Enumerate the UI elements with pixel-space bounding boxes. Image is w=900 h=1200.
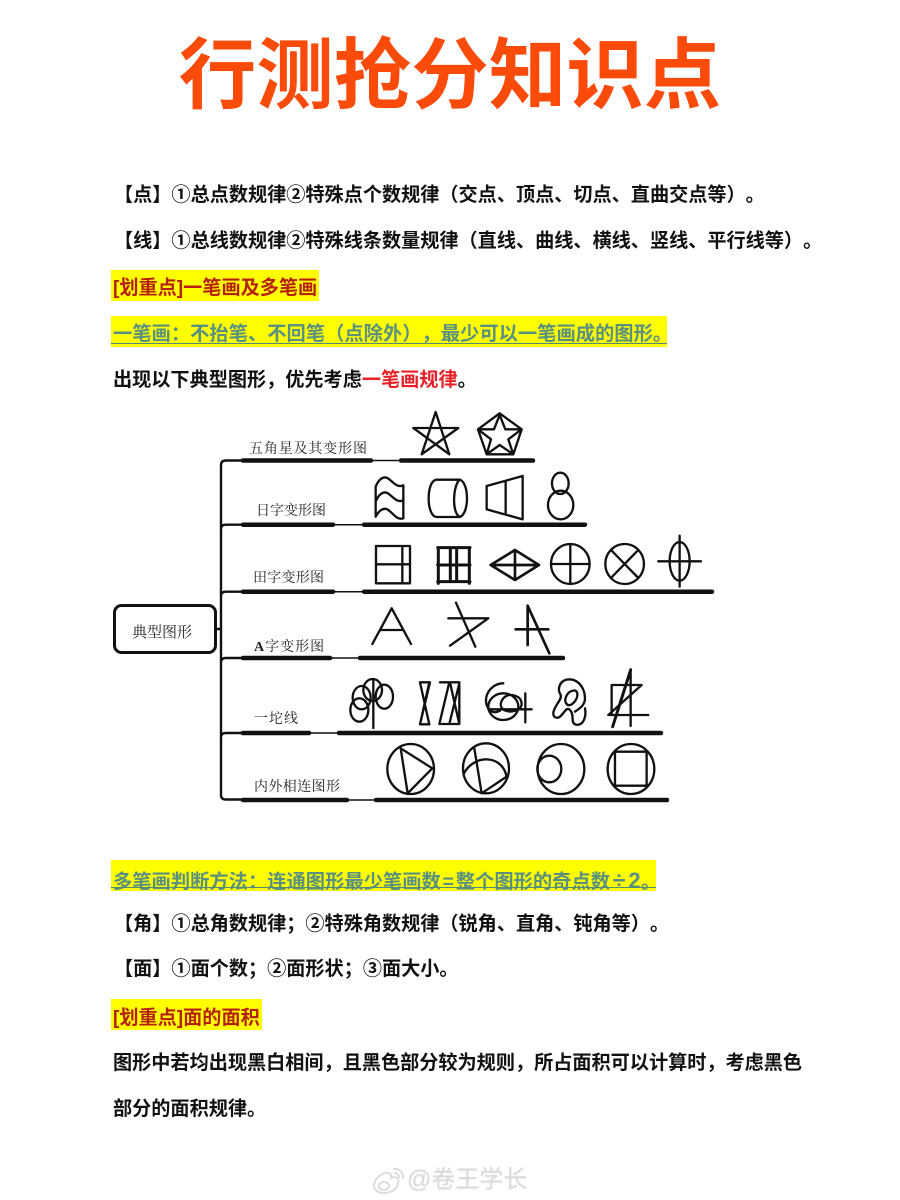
icon: circle with inner circle: [537, 744, 584, 794]
icon: looped tree: [350, 679, 393, 728]
icon: crossed A: [448, 603, 488, 647]
text: area explanation: 图形中若均出现黑白相间，且黑色部分较为规则，所占面积可以计算时，考虑黑色: [113, 1053, 802, 1074]
icon: circle with curved lines: [463, 743, 509, 793]
tree connectors: [216, 460, 243, 800]
icon: cylinder: [429, 480, 467, 517]
branch 3: 田 variants: 田字变形图: [253, 569, 324, 586]
icon: split rectangle: [376, 546, 410, 583]
highlight heading: one-stroke and multi-stroke: [111, 270, 319, 301]
icon: figure eight: [548, 473, 573, 519]
highlight heading: one-stroke and multi-stroke: [划重点]一笔画及多笔画: [113, 278, 317, 299]
branch 5: tangled line: 一坨线: [254, 710, 298, 727]
branch 4: A variants: A字变形图: [254, 638, 325, 655]
branch 6: connected inner and outer figures: [243, 743, 667, 800]
highlight heading: face area: [划重点]面的面积: [113, 1008, 260, 1029]
icon: thick 田: [438, 548, 470, 583]
icon: trapezoid: [487, 476, 523, 519]
watermark: [373, 1166, 527, 1194]
highlight definition: multi-stroke: =: [443, 872, 454, 893]
branch 6: connected inner and outer figures: 内外相连图形: [254, 778, 340, 795]
icon: ellipse with cross: [658, 536, 701, 587]
icon: circle with X: [605, 544, 644, 584]
branch 3: 田 variants: [243, 536, 712, 592]
icon: weibo logo: [373, 1168, 404, 1194]
icon: star in pentagon: [478, 413, 522, 454]
diagram: typical one-stroke figures: [113, 410, 714, 802]
highlight definition: one-stroke: [111, 316, 667, 347]
highlight definition: multi-stroke: 多笔画判断方法：连通图形最少笔画数 整个图形的奇点数 。: [113, 872, 660, 893]
root box: typical figures: [114, 606, 216, 652]
root box: typical figures: 典型图形: [132, 623, 192, 641]
icon: open A: [516, 606, 549, 653]
text: angle rules: 【角】①总角数规律；②特殊角数规律（锐角、直角、钝角等）。: [114, 914, 669, 935]
branch 5: tangled line: [243, 669, 661, 733]
icon: wavy 日: [376, 477, 403, 519]
text: face rules: 【面】①面个数；②面形状；③面大小。: [114, 959, 459, 980]
icon: blob: [553, 679, 585, 725]
branch 2: 日 variants: [243, 473, 585, 525]
icon: swirl with cross: [486, 683, 532, 722]
icon: pentagram: [413, 412, 458, 454]
highlight definition: multi-stroke: ÷: [613, 867, 625, 893]
icon: circle with triangle: [387, 744, 434, 794]
icon: circle with square: [608, 744, 654, 794]
text: typical figures intro: 出现以下典型图形，优先考虑一笔画规律。: [113, 370, 477, 391]
icon: diamond with cross: [491, 550, 539, 580]
branch 1: pentagram variants: 五角星及其变形图: [249, 440, 367, 457]
title: 行测抢分知识点: [179, 33, 721, 119]
highlight definition: one-stroke: 一笔画：不抬笔、不回笔（点除外），最少可以一笔画成的图形。: [113, 324, 672, 345]
highlight definition: multi-stroke: [111, 860, 656, 891]
watermark text: @卷王学长: [407, 1166, 527, 1193]
text: area explanation continued: 部分的面积规律。: [113, 1099, 266, 1120]
branch 2: 日 variants: 日字变形图: [256, 502, 326, 519]
icon: crossed square: [608, 669, 648, 726]
text: line rules: 【线】①总线数规律②特殊线条数量规律（直线、曲线、横线、竖线、平行线等）。: [114, 231, 822, 252]
text: point rules: 【点】①总点数规律②特殊点个数规律（交点、顶点、切点、直曲交点等）。: [114, 185, 765, 206]
highlight definition: multi-stroke: 2: [628, 868, 641, 893]
icon: zigzag bars: [420, 682, 459, 724]
branch 1: pentagram variants: [243, 412, 533, 460]
highlight heading: face area: [111, 999, 262, 1030]
branch 4: A variants: [243, 603, 563, 658]
icon: letter A: [372, 608, 411, 644]
icon: circle with cross: [551, 544, 590, 584]
